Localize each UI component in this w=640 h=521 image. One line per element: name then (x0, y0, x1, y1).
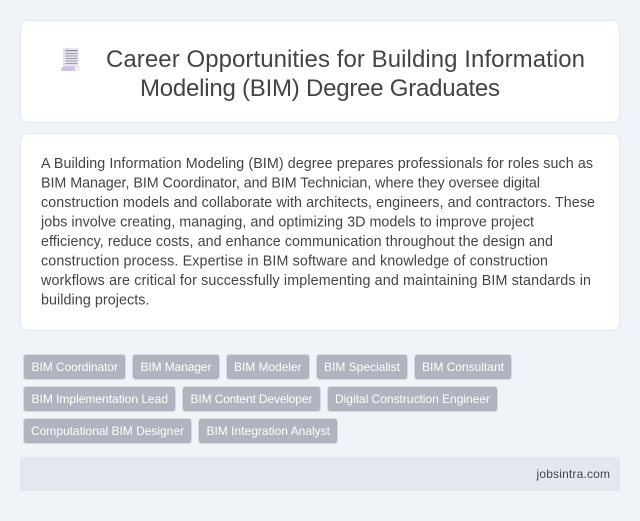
tag: BIM Content Developer (182, 386, 320, 412)
title (106, 46, 585, 102)
text block: description: workflows are critical for successfully implementing and maintaining BIM standards in (40, 273, 591, 289)
text block: description: BIM Manager, BIM Coordinator, and BIM Technician, where they oversee digital (41, 176, 540, 192)
tag: Digital Construction Engineer: Digital Construction Engineer (335, 392, 490, 406)
text block: description: A Building Information Modeling (BIM) degree prepares professionals for roles such as (41, 156, 593, 172)
title: Career Opportunities for Building Information (106, 46, 585, 73)
text block: description: construction process. Expertise in BIM software and knowledge of construction (41, 254, 548, 270)
tags: job titles (24, 354, 512, 444)
tag: BIM Integration Analyst: BIM Integration Analyst (206, 424, 331, 438)
text block: description: building projects. (41, 292, 150, 308)
tag: BIM Manager (132, 354, 220, 380)
footer text: jobsintra.com: jobsintra.com (536, 467, 610, 481)
tag: Computational BIM Designer (24, 418, 192, 444)
tag: BIM Specialist: BIM Specialist (324, 360, 401, 374)
tag: BIM Modeler: BIM Modeler (234, 360, 302, 374)
title: Modeling (BIM) Degree Graduates (140, 75, 500, 102)
tag: BIM Coordinator: BIM Coordinator (32, 360, 118, 374)
tag: Computational BIM Designer: Computational BIM Designer (31, 424, 184, 438)
tag: BIM Modeler (226, 354, 310, 380)
text block: description: efficiency, reduce costs, and enhance communication throughout the design and (41, 234, 553, 250)
text block: description: construction models and collaborate with architects, engineers, and contractors. These (41, 195, 595, 211)
panel: title card (20, 20, 620, 122)
tag: BIM Implementation Lead: BIM Implementation Lead (32, 392, 168, 406)
tag: BIM Consultant: BIM Consultant (422, 360, 505, 374)
tag: Digital Construction Engineer (328, 386, 498, 412)
tag: BIM Consultant (414, 354, 512, 380)
text block: description (40, 156, 595, 308)
footer (20, 457, 620, 491)
tag: BIM Integration Analyst (198, 418, 338, 444)
icon: document scroll (61, 48, 80, 71)
tag: BIM Specialist (316, 354, 408, 380)
text block: description: jobs involve creating, managing, and optimizing 3D models to improve project (40, 214, 534, 230)
tag: BIM Content Developer: BIM Content Developer (190, 392, 312, 406)
panel: description (20, 134, 620, 330)
tag: BIM Manager: BIM Manager (140, 360, 212, 374)
tag: BIM Implementation Lead (24, 386, 176, 412)
tag: BIM Coordinator (24, 354, 126, 380)
